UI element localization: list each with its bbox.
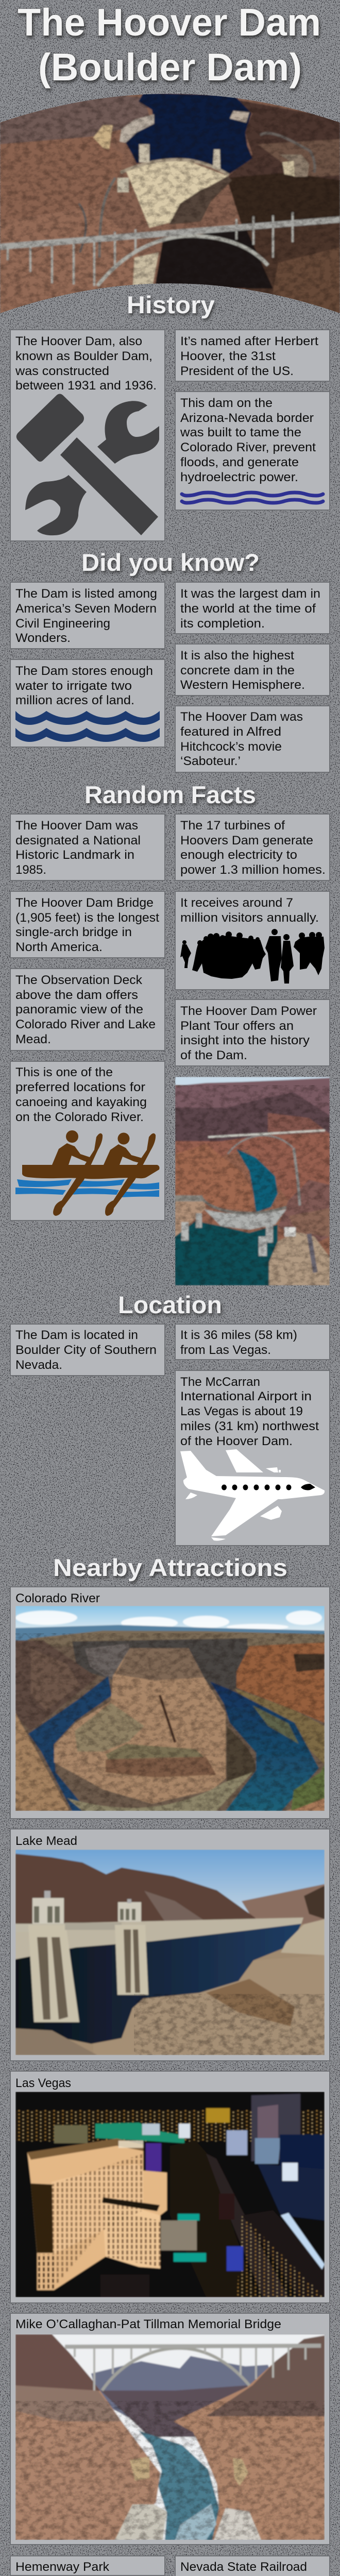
hero photo: Hoover Dam aerial xyxy=(0,94,340,313)
panel: Lake Mead: Lake Mead xyxy=(15,1834,77,1848)
panel: largest dam xyxy=(175,582,330,634)
panel: largest dam: the world at the time of xyxy=(180,602,316,616)
panel: power plant tour: insight into the history xyxy=(180,1033,310,1047)
panel: bridge: (1,905 feet) is the longest xyxy=(15,911,159,925)
title: The Hoover Dam xyxy=(18,1,321,44)
panel: visitors with crowd xyxy=(175,891,330,990)
panel: distance from Las Vegas xyxy=(175,1324,330,1360)
bridge xyxy=(228,1136,293,1154)
panel: named after Herbert Hoover: It’s named after Herbert xyxy=(180,334,318,348)
panel: turbines: power 1.3 million homes. xyxy=(180,863,326,877)
panel: observation deck: The Observation Deck xyxy=(15,973,143,987)
panel: observation deck: panoramic view of the xyxy=(15,1003,143,1016)
panel: seven modern wonders: America’s Seven Modern xyxy=(15,602,157,616)
panel: visitors with crowd: million visitors annually. xyxy=(180,911,319,925)
panel: power plant tour xyxy=(175,999,330,1066)
panel: distance from Las Vegas: It is 36 miles (58 km) xyxy=(180,1328,297,1342)
panel: canoeing and kayaking: This is one of the xyxy=(15,1065,113,1079)
icon: hammer and wrench xyxy=(16,394,159,535)
panel: power plant tour: Plant Tour offers an xyxy=(180,1019,294,1033)
right tower xyxy=(115,1899,148,1995)
panel: McCarran airport with plane: Las Vegas is about 19 xyxy=(180,1404,303,1418)
panel: canoeing and kayaking: preferred locations for xyxy=(15,1080,145,1094)
icon: water waves xyxy=(15,711,160,742)
title: (Boulder Dam) xyxy=(38,45,302,89)
panel: Las Vegas: Las Vegas xyxy=(15,2076,71,2090)
panel: purpose of the dam: hydroelectric power. xyxy=(180,470,298,484)
panel: turbines: Hoovers Dam generate xyxy=(180,834,313,848)
panel: seven modern wonders: The Dam is listed among xyxy=(15,587,157,601)
panel: observation deck: Colorado River and Lake xyxy=(15,1018,156,1031)
heading: Did you know?: Did you know? xyxy=(81,549,260,576)
rivers xyxy=(28,1676,112,1811)
text: construction dates: was constructed xyxy=(15,364,109,378)
panel: named after Herbert Hoover xyxy=(175,330,330,381)
heading: Location: Location xyxy=(118,1291,222,1318)
panel: visitors with crowd: It receives around 7 xyxy=(180,896,293,910)
panel: water storage with waves: water to irrigate two xyxy=(15,679,132,693)
panel: canoeing and kayaking xyxy=(10,1061,165,1221)
photo: Lake Mead intake towers xyxy=(15,1850,325,2055)
title xyxy=(18,1,321,89)
textured grey background, lower section xyxy=(0,2550,340,2576)
panel: observation deck: Mead. xyxy=(15,1032,51,1046)
panel: power plant tour: of the Dam. xyxy=(180,1048,247,1062)
bridge arch and columns xyxy=(97,236,268,286)
panel: purpose of the dam: Colorado River, prevent xyxy=(180,440,316,454)
panel: Saboteur: The Hoover Dam was xyxy=(180,710,303,724)
panel: turbines: The 17 turbines of xyxy=(180,819,285,833)
panel: water storage with waves xyxy=(10,659,165,747)
panel: named after Herbert Hoover: Hoover, the 31st xyxy=(180,349,276,363)
panel: purpose of the dam xyxy=(175,392,330,510)
river xyxy=(236,1149,278,1212)
panel: history left with tools icon xyxy=(10,330,165,541)
panel: turbines xyxy=(175,814,330,880)
panel: Lake Mead xyxy=(10,1829,330,2061)
reservoir water xyxy=(126,93,252,174)
text: construction dates: known as Boulder Dam, xyxy=(15,349,152,363)
panel: canoeing and kayaking: on the Colorado River. xyxy=(15,1110,144,1124)
dam crest xyxy=(204,1209,286,1230)
panel: Mike O'Callaghan-Pat Tillman Memorial Bridge: Mike O’Callaghan-Pat Tillman Memorial Bridge xyxy=(15,2317,281,2331)
panel: power plant tour: The Hoover Dam Power xyxy=(180,1004,317,1018)
panel: Las Vegas xyxy=(10,2071,330,2303)
panel: turbines: enough electricity to xyxy=(180,848,297,862)
panel: purpose of the dam: Arizona-Nevada border xyxy=(180,411,314,425)
panel: Saboteur: ‘Saboteur.’ xyxy=(180,754,241,768)
hotel facade xyxy=(27,2139,167,2290)
panel: Boulder City: The Dam is located in xyxy=(15,1328,138,1342)
left tower xyxy=(15,1891,79,2022)
panel: purpose of the dam: was built to tame the xyxy=(180,426,301,439)
panel: Saboteur xyxy=(175,706,330,772)
bridge arch xyxy=(102,2348,249,2391)
panel: highest concrete dam: Western Hemisphere. xyxy=(180,678,305,692)
panel: highest concrete dam: concrete dam in the xyxy=(180,664,295,677)
panel: McCarran airport with plane: miles (31 km) northwest xyxy=(180,1419,319,1433)
dam face xyxy=(126,161,228,228)
photo: Las Vegas Strip at night xyxy=(15,2092,325,2297)
panel: McCarran airport with plane xyxy=(175,1370,330,1546)
photo: Horseshoe Bend xyxy=(15,1606,325,1811)
panel: canoeing and kayaking: canoeing and kayaking xyxy=(15,1095,147,1109)
central butte xyxy=(54,1648,226,1804)
panel: bridge xyxy=(10,891,165,958)
panel: highest concrete dam: It is also the highest xyxy=(180,649,294,663)
panel: bridge: The Hoover Dam Bridge xyxy=(15,896,154,910)
panel: national historic landmark xyxy=(10,814,165,880)
panel: bridge: single-arch bridge in xyxy=(15,925,132,939)
panel: purpose of the dam: This dam on the xyxy=(180,396,273,410)
panel: national historic landmark: The Hoover Dam was xyxy=(15,819,138,833)
panel: seven modern wonders xyxy=(10,582,165,649)
panel: national historic landmark: Historic Landmark in xyxy=(15,848,134,862)
panel: Hemenway Park: Hemenway Park xyxy=(15,2560,110,2574)
lake xyxy=(175,1221,278,1285)
panel: Boulder City: Boulder City of Southern xyxy=(15,1343,157,1357)
panel: Boulder City: Nevada. xyxy=(15,1358,62,1372)
icon: crowd silhouette xyxy=(180,929,325,984)
heading: History: History xyxy=(127,291,215,318)
panel: largest dam: its completion. xyxy=(180,617,265,631)
panel: water storage with waves: million acres of land. xyxy=(15,693,134,707)
panel: named after Herbert Hoover: President of the US. xyxy=(180,364,294,378)
panel: Nevada State Railroad Museum: Nevada State Railroad xyxy=(180,2560,307,2574)
panel: seven modern wonders: Wonders. xyxy=(15,631,71,645)
panel: McCarran airport with plane: of the Hoover Dam. xyxy=(180,1434,293,1448)
heading: Random Facts: Random Facts xyxy=(84,781,256,808)
panel: Saboteur: Hitchcock’s movie xyxy=(180,740,282,754)
panel: highest concrete dam xyxy=(175,644,330,696)
panel: seven modern wonders: Civil Engineering xyxy=(15,617,110,631)
photo: bridge over canyon xyxy=(15,2334,325,2540)
panel: distance from Las Vegas: from Las Vegas. xyxy=(180,1343,271,1357)
panel: Saboteur: featured in Alfred xyxy=(180,725,281,739)
panel: largest dam: It was the largest dam in xyxy=(180,587,320,601)
panel: Colorado River: Colorado River xyxy=(15,1591,100,1605)
panel: Boulder City xyxy=(10,1324,165,1376)
icon: river waves xyxy=(182,493,323,503)
icon: canoe with two paddlers xyxy=(15,1130,160,1216)
text: construction dates xyxy=(15,334,157,393)
panel: national historic landmark: designated a National xyxy=(15,834,141,848)
icon: airplane xyxy=(180,1449,325,1541)
left canyon wall xyxy=(15,1640,97,1731)
panel: observation deck: above the dam offers xyxy=(15,988,138,1002)
panel: Hemenway Park xyxy=(10,2556,165,2575)
panel: national historic landmark: 1985. xyxy=(15,863,46,877)
right wall xyxy=(236,1642,325,1723)
panel: purpose of the dam: floods, and generate xyxy=(180,455,299,469)
photo: dam and bridge aerial xyxy=(175,1077,330,1285)
panel: Nevada State Railroad Museum xyxy=(175,2556,330,2576)
panel: observation deck xyxy=(10,969,165,1050)
text: construction dates: between 1931 and 1936. xyxy=(15,379,157,393)
pools xyxy=(174,2253,206,2262)
panel: water storage with waves: The Dam stores enough xyxy=(15,664,153,678)
heading: Nearby Attractions: Nearby Attractions xyxy=(53,1554,287,1581)
panel: bridge: North America. xyxy=(15,940,103,954)
lower left rock xyxy=(15,1713,70,1811)
panel: Mike O'Callaghan-Pat Tillman Memorial Bridge xyxy=(10,2313,330,2545)
panel: Colorado River xyxy=(10,1587,330,1819)
panel: McCarran airport with plane: International Airport in xyxy=(180,1389,312,1403)
text: construction dates: The Hoover Dam, also xyxy=(15,334,142,348)
panel: McCarran airport with plane: The McCarran xyxy=(180,1375,260,1389)
walkway xyxy=(65,1923,122,1930)
shadow under bridge xyxy=(155,227,273,289)
